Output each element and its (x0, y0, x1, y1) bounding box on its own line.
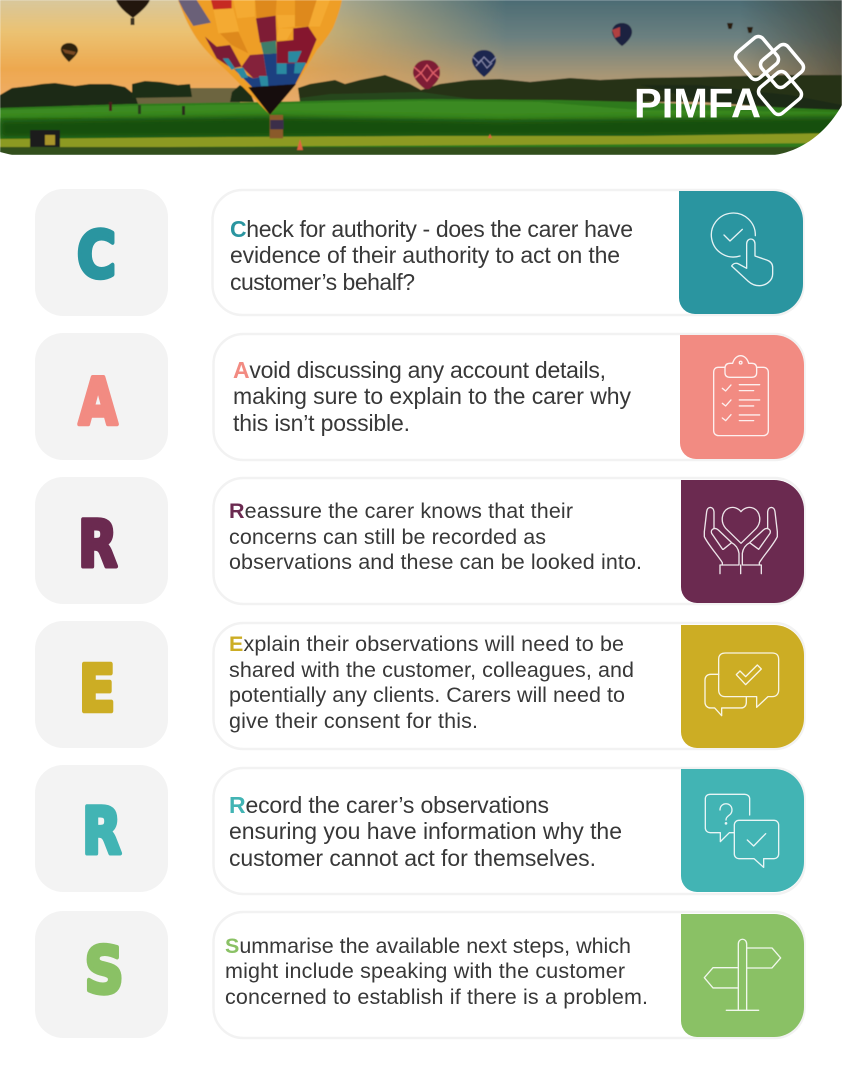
text card R: concerns can still be recorded as (229, 525, 546, 549)
text card E (214, 623, 804, 749)
balloon: small left (61, 43, 78, 62)
row 3: R (35, 477, 804, 604)
text card S: Summarise the available next steps, which (225, 934, 631, 958)
row 6: S (35, 911, 804, 1038)
row 4: E (35, 621, 804, 749)
letter tile R: R (82, 795, 121, 869)
text card R: observations and these can be looked into. (229, 550, 642, 574)
balloon: top left silhouette (116, 0, 150, 18)
text card R (214, 478, 804, 604)
logo squares (733, 34, 806, 117)
text card C: evidence of their authority to act on the (230, 242, 620, 268)
letter tile E (35, 621, 168, 748)
text card R: ensuring you have information why the (229, 818, 622, 844)
letter tile A (35, 333, 168, 460)
text card A: making sure to explain to the carer why (233, 383, 632, 409)
letter tile C (35, 189, 168, 316)
icon panel: signpost (681, 914, 804, 1037)
logo wordmark: PIMFA (634, 80, 761, 126)
text card C: customer’s behalf? (230, 269, 415, 295)
text card R: customer cannot act for themselves. (229, 845, 596, 871)
letter tile R (35, 477, 168, 604)
balloon: upper right (612, 23, 632, 46)
text card C: Check for authority - does the carer have (230, 216, 633, 242)
text card R: Reassure the carer knows that their (229, 499, 573, 523)
letter tile E: E (79, 653, 115, 727)
letter tile S: S (85, 934, 124, 1008)
letter tile R (35, 765, 168, 892)
text card R (214, 768, 804, 894)
grass: bands (0, 98, 840, 147)
row 1: C (35, 189, 804, 316)
text card R: Record the carer’s observations (229, 792, 549, 818)
balloon basket (270, 115, 284, 138)
distant village (135, 88, 240, 106)
balloon: blue (472, 50, 496, 77)
icon panel: question and answer bubbles (681, 769, 804, 892)
cones and figures (296, 134, 492, 151)
text card S: concerned to establish if there is a problem. (225, 985, 648, 1009)
balloon: red striped (413, 60, 440, 89)
PIMFA logo (634, 34, 806, 127)
icon panel: speech bubbles with check (681, 625, 804, 748)
header photo: hot air balloons over a field (0, 0, 842, 155)
letter tile A: A (79, 366, 118, 440)
text card S (214, 912, 804, 1038)
text card E: potentially any clients. Carers will need to (229, 683, 625, 707)
icon panel: clipboard checklist (680, 335, 804, 459)
icon panel: hand tapping check (679, 191, 803, 314)
text card E: shared with the customer, colleagues, and (229, 658, 634, 682)
text card A (214, 334, 804, 460)
balloons: tiny far (727, 23, 753, 33)
text card S: might include speaking with the customer (225, 959, 625, 983)
icon panel: hands holding heart (681, 480, 804, 603)
text card A: Avoid discussing any account details, (233, 357, 606, 383)
text card E: Explain their observations will need to be (229, 632, 624, 656)
row 5: R (35, 765, 804, 894)
text card C (212, 190, 804, 315)
letter tile R: R (78, 508, 117, 582)
text card A: this isn’t possible. (233, 410, 410, 436)
text card E: give their consent for this. (229, 709, 478, 733)
row 2: A (35, 333, 804, 460)
letter tile S (35, 911, 168, 1038)
tree line (0, 83, 138, 108)
letter tile C: C (77, 219, 116, 293)
balloon: large foreground (178, 0, 342, 115)
